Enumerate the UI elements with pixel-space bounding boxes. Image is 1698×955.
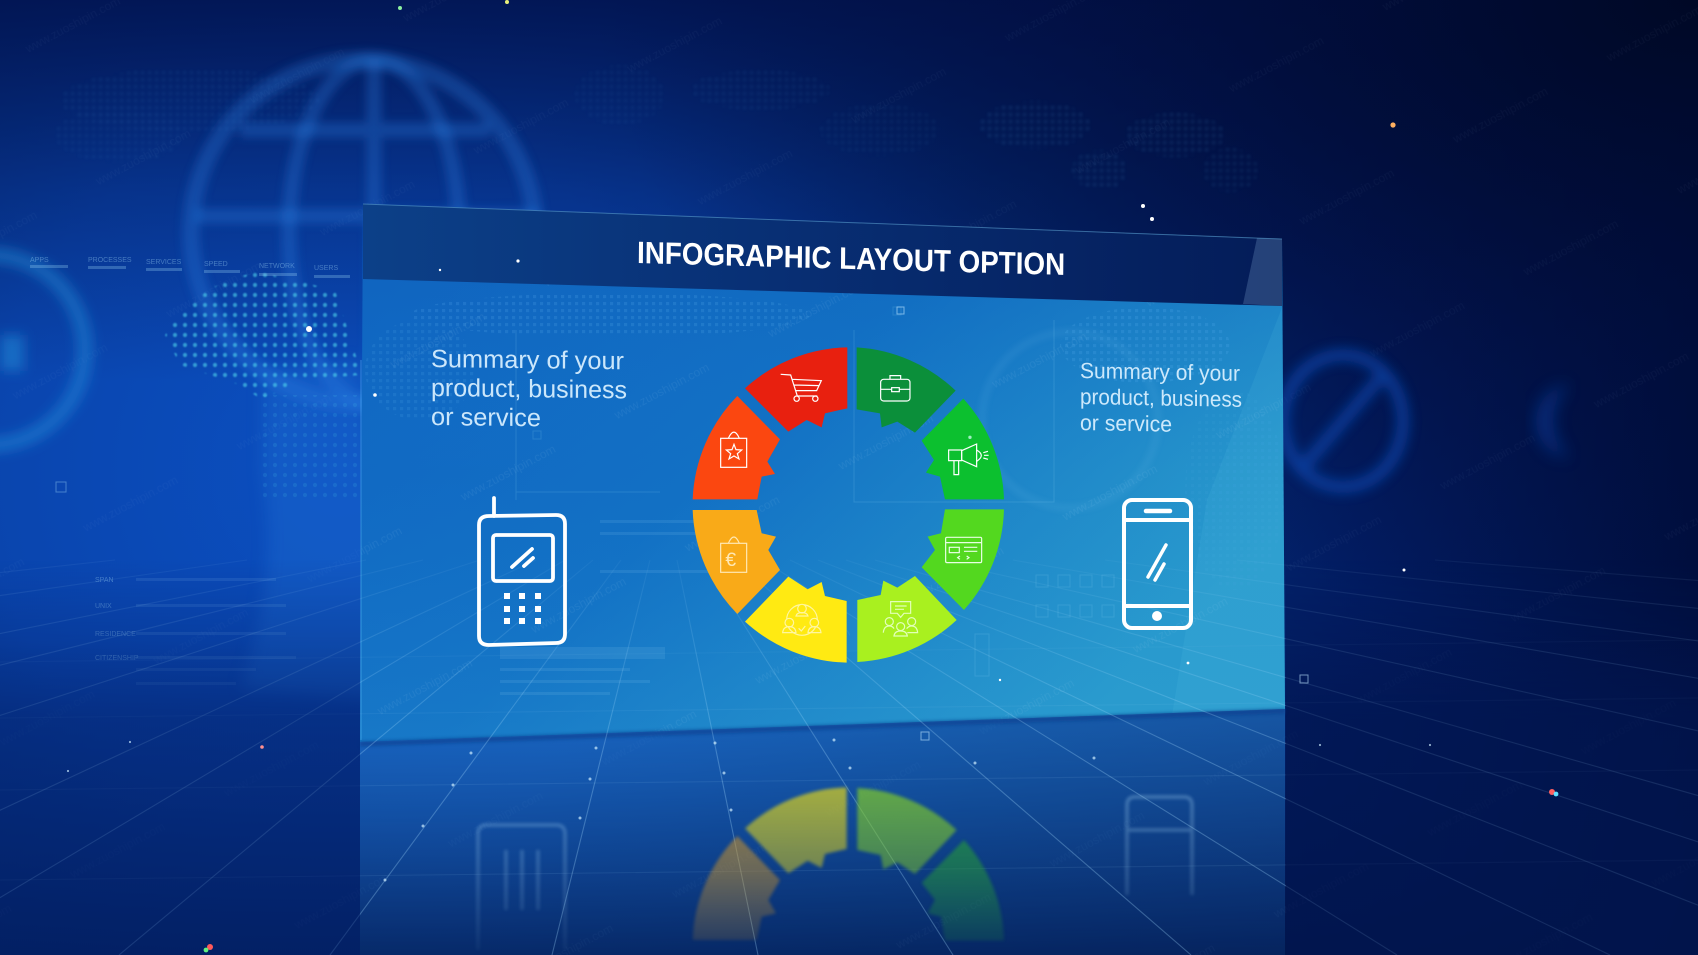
faint data labels, left: PROCESSES xyxy=(88,257,132,264)
segment: collaboration xyxy=(745,577,847,663)
panel data boxes xyxy=(516,307,1114,676)
segment: euro bag xyxy=(693,510,780,614)
floor side shading xyxy=(0,560,1698,955)
globe xyxy=(191,60,540,404)
right yin-yang xyxy=(1536,385,1570,457)
faint data labels, left: SPAN xyxy=(95,577,114,584)
icon: cart xyxy=(781,374,821,401)
faint data labels, left: NETWORK xyxy=(259,263,295,270)
panel dot texture xyxy=(366,295,1229,417)
light particles xyxy=(204,0,1558,952)
faint data labels, left: USERS xyxy=(314,265,338,272)
left summary text xyxy=(431,345,627,433)
icon: megaphone xyxy=(949,436,989,475)
icon: briefcase xyxy=(881,376,910,401)
icon: browser window xyxy=(946,537,982,563)
segment: briefcase xyxy=(857,347,956,433)
right summary text: Summary of your xyxy=(1080,358,1240,386)
left summary text: or service xyxy=(431,403,541,432)
icon: smartphone xyxy=(1124,500,1191,628)
right summary text xyxy=(1080,358,1242,438)
title bar xyxy=(363,204,1282,306)
faint data labels, left: SERVICES xyxy=(146,259,182,266)
head map dots xyxy=(165,272,362,500)
icon: bag with star xyxy=(721,432,747,467)
panel sheen xyxy=(1282,310,1283,316)
floor perspective grid xyxy=(0,560,1698,955)
segment: star bag xyxy=(693,396,780,499)
circular diagram xyxy=(693,347,1004,663)
left ring xyxy=(0,255,85,445)
reflections on the floor xyxy=(478,787,1192,950)
faint data labels, left: SPEED xyxy=(204,261,228,268)
segment: cart xyxy=(745,347,847,432)
right forbidden sign xyxy=(1283,355,1403,487)
right summary text: or service xyxy=(1080,410,1172,437)
left summary text: Summary of your xyxy=(431,345,624,375)
faint data labels, left: CITIZENSHIP xyxy=(95,655,139,662)
left summary text: product, business xyxy=(431,374,627,404)
head silhouette xyxy=(240,360,400,700)
panel edge glows xyxy=(362,290,364,350)
grid intersection dots xyxy=(67,738,1431,882)
segment: team chat xyxy=(857,576,957,662)
floor reflection of panel xyxy=(360,709,1285,955)
icon: group in a circle xyxy=(783,604,821,635)
reflected phones xyxy=(478,797,1192,950)
segment: browser xyxy=(922,509,1004,610)
world map dot field xyxy=(55,65,1258,192)
faint data labels, left: APPS xyxy=(30,257,49,264)
title: INFOGRAPHIC LAYOUT OPTION xyxy=(637,235,1065,282)
faint data labels, left: UNIX xyxy=(95,603,112,610)
faint data labels, left xyxy=(30,257,350,685)
icon: keypad phone xyxy=(479,498,565,645)
segment: megaphone xyxy=(922,399,1004,499)
reflected ring xyxy=(693,787,1004,941)
panel xyxy=(360,200,1290,745)
faint data labels, left: RESIDENCE xyxy=(95,631,136,638)
icon: bag with euro sign: € xyxy=(725,550,736,571)
icon: people with chat bubble xyxy=(883,602,918,636)
small markers on floor xyxy=(897,307,1308,740)
right summary text: product, business xyxy=(1080,384,1242,412)
